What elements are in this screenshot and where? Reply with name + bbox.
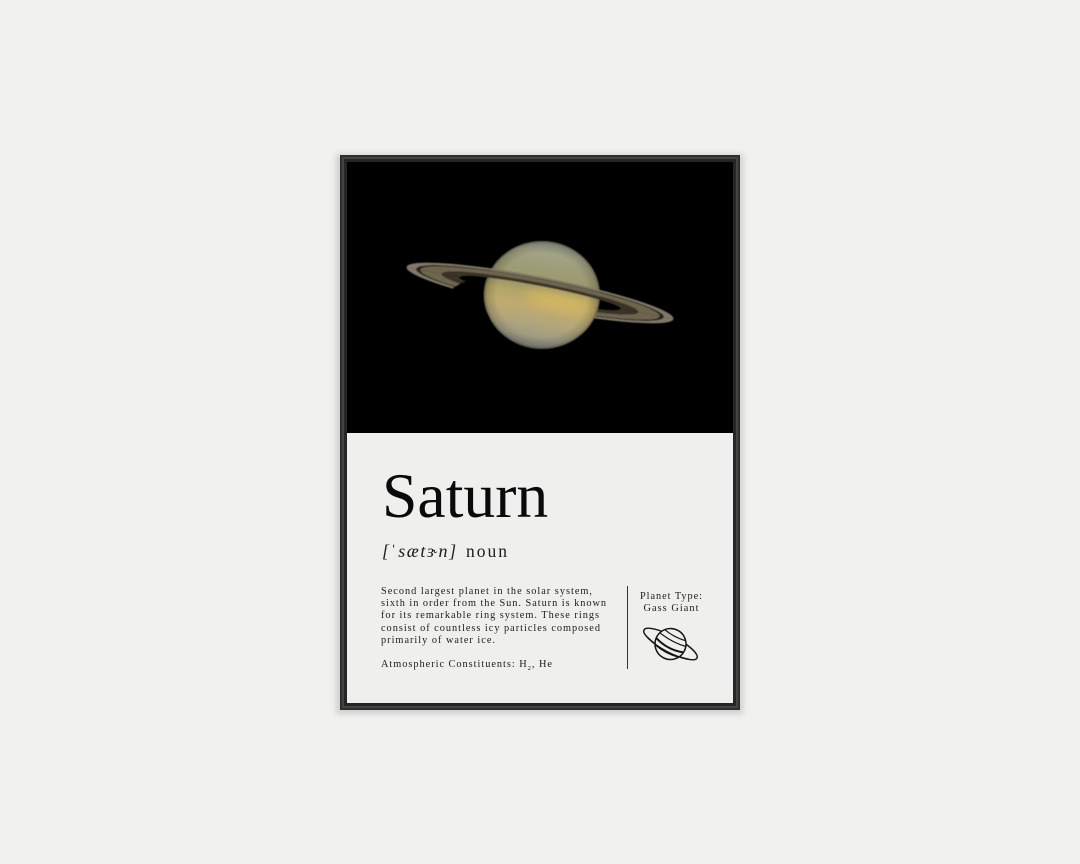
planet type label: Gass Giant (644, 603, 699, 614)
vertical divider (627, 586, 628, 669)
frame shadow (336, 154, 743, 714)
black image panel (347, 162, 733, 433)
planet type label (640, 591, 702, 614)
white text panel (347, 433, 733, 703)
description text block: sixth in order from the Sun. Saturn is known (381, 598, 606, 609)
icon: ringed planet (637, 616, 704, 672)
far side of rings (406, 266, 674, 324)
phonetic spelling and word class (382, 541, 507, 561)
planet limb shading (484, 241, 600, 349)
description text block: consist of countless icy particles composed (381, 623, 601, 634)
description text block: Second largest planet in the solar system, (381, 586, 592, 597)
atmospheric constituents: Atmospheric Constituents: H (381, 659, 527, 670)
Saturn planet photo (403, 241, 677, 349)
planet body (484, 241, 600, 349)
phonetic spelling and word class: [ˈsætɝn] (382, 541, 458, 561)
phonetic spelling and word class: noun (466, 541, 507, 561)
planet type label: Planet Type: (640, 591, 702, 602)
description text block: primarily of water ice. (381, 635, 495, 646)
black poster frame (340, 155, 740, 710)
atmospheric constituents: 2 (528, 665, 531, 672)
title: Saturn (382, 460, 548, 531)
planet cloud highlight (526, 286, 594, 315)
framed poster scene (334, 152, 745, 716)
planet shadow across the rings (451, 279, 492, 312)
description text block (381, 586, 606, 646)
description text block: for its remarkable ring system. These rings (381, 610, 599, 621)
near side of rings (406, 262, 674, 320)
atmospheric constituents: , He (532, 659, 552, 670)
